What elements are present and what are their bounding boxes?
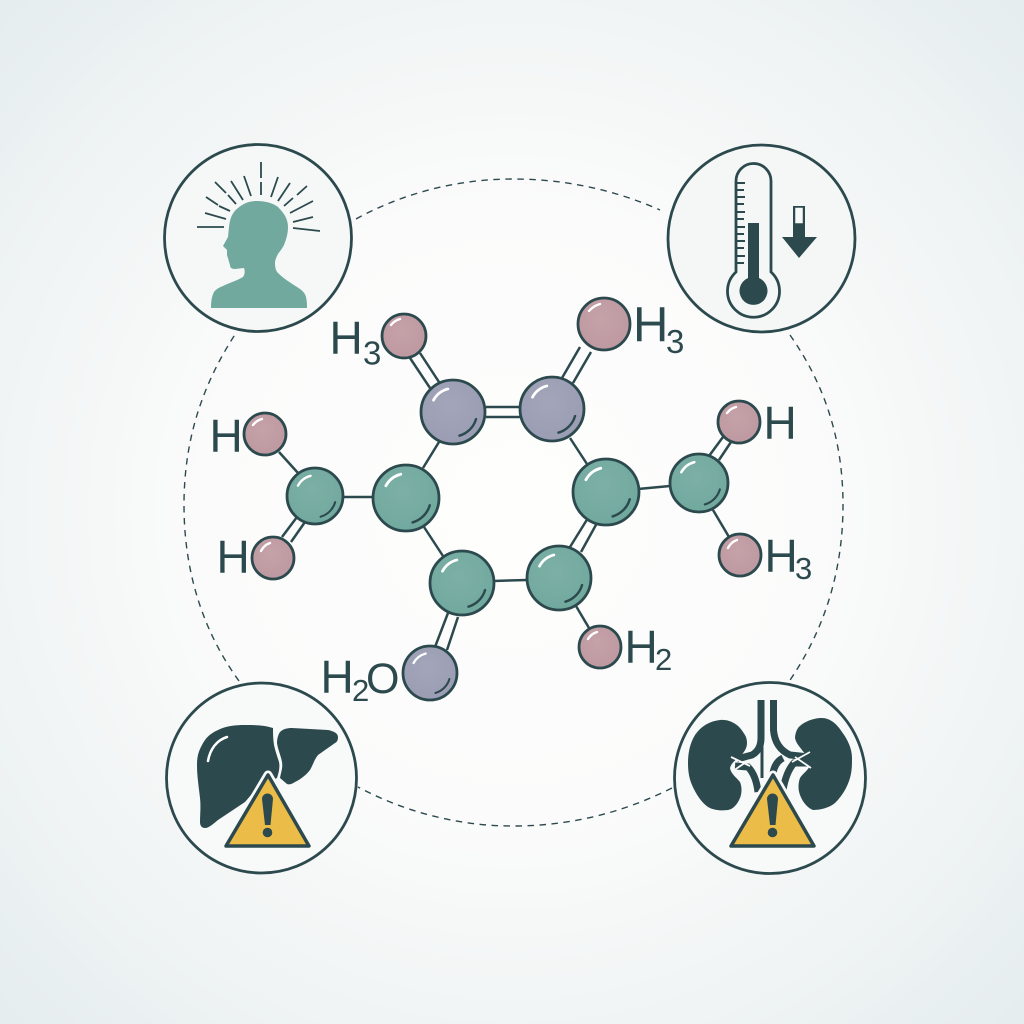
label: H left upper: H	[210, 410, 243, 462]
panel: kidney warning icon	[674, 682, 866, 874]
icon: warning triangle	[226, 775, 309, 846]
icon: ureters	[731, 700, 811, 796]
icon: liver	[197, 725, 338, 828]
icon: down arrow	[782, 206, 817, 258]
icon: radiating lines	[197, 162, 320, 231]
label: H3 lower right: 3	[795, 551, 812, 586]
label: H3 upper right: 3	[666, 323, 684, 360]
atoms	[244, 298, 761, 700]
dashed ring	[184, 179, 843, 826]
label: H right upper: H	[764, 397, 797, 449]
panel: liver warning icon	[166, 683, 356, 873]
icon: warning triangle	[731, 775, 814, 846]
label: H3 upper left: 3	[363, 334, 381, 372]
icon: head silhouette	[211, 201, 307, 308]
molecule	[244, 298, 761, 700]
icon: thermometer	[728, 164, 780, 317]
label: H3 upper right: H	[633, 298, 668, 352]
label: H2 lower right: H	[624, 621, 658, 673]
label: H2O: 2	[352, 673, 369, 708]
icon: kidneys	[688, 718, 852, 810]
label: H left lower: H	[216, 531, 250, 583]
bonds	[279, 347, 731, 650]
label: H2O: O	[366, 655, 399, 703]
chemical labels	[210, 298, 812, 708]
label: H3 lower right: H	[764, 530, 798, 582]
panel: temperature icon	[668, 145, 855, 332]
label: H2O: H	[320, 651, 354, 703]
panel: headache icon	[164, 144, 352, 332]
label: H3 upper left: H	[330, 312, 363, 364]
atom highlights	[253, 304, 737, 693]
label: H2 lower right: 2	[655, 642, 672, 677]
